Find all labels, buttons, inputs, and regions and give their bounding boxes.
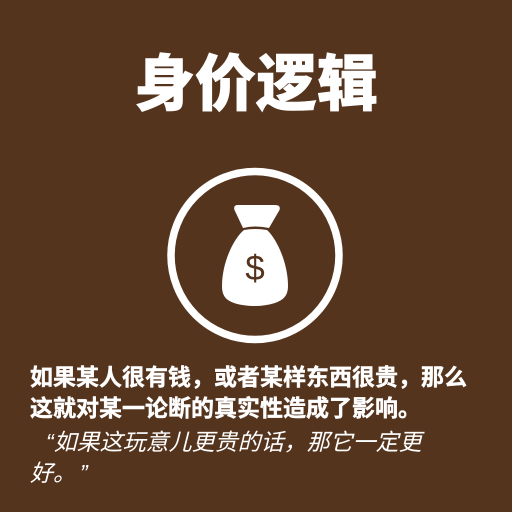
body text (30, 364, 467, 486)
title: 身价逻辑 (134, 50, 378, 118)
body text: ” (80, 460, 88, 486)
body text: 如果某人很有钱，或者某样东西很贵，那么 (30, 364, 467, 390)
body text: 这就对某一论断的真实性造成了影响。 (30, 395, 421, 421)
icon: money bag in circle: $ (245, 249, 265, 288)
body text: 好。 (30, 460, 76, 486)
body text: “如果这玩意儿更贵的话，那它一定更 (46, 429, 422, 455)
